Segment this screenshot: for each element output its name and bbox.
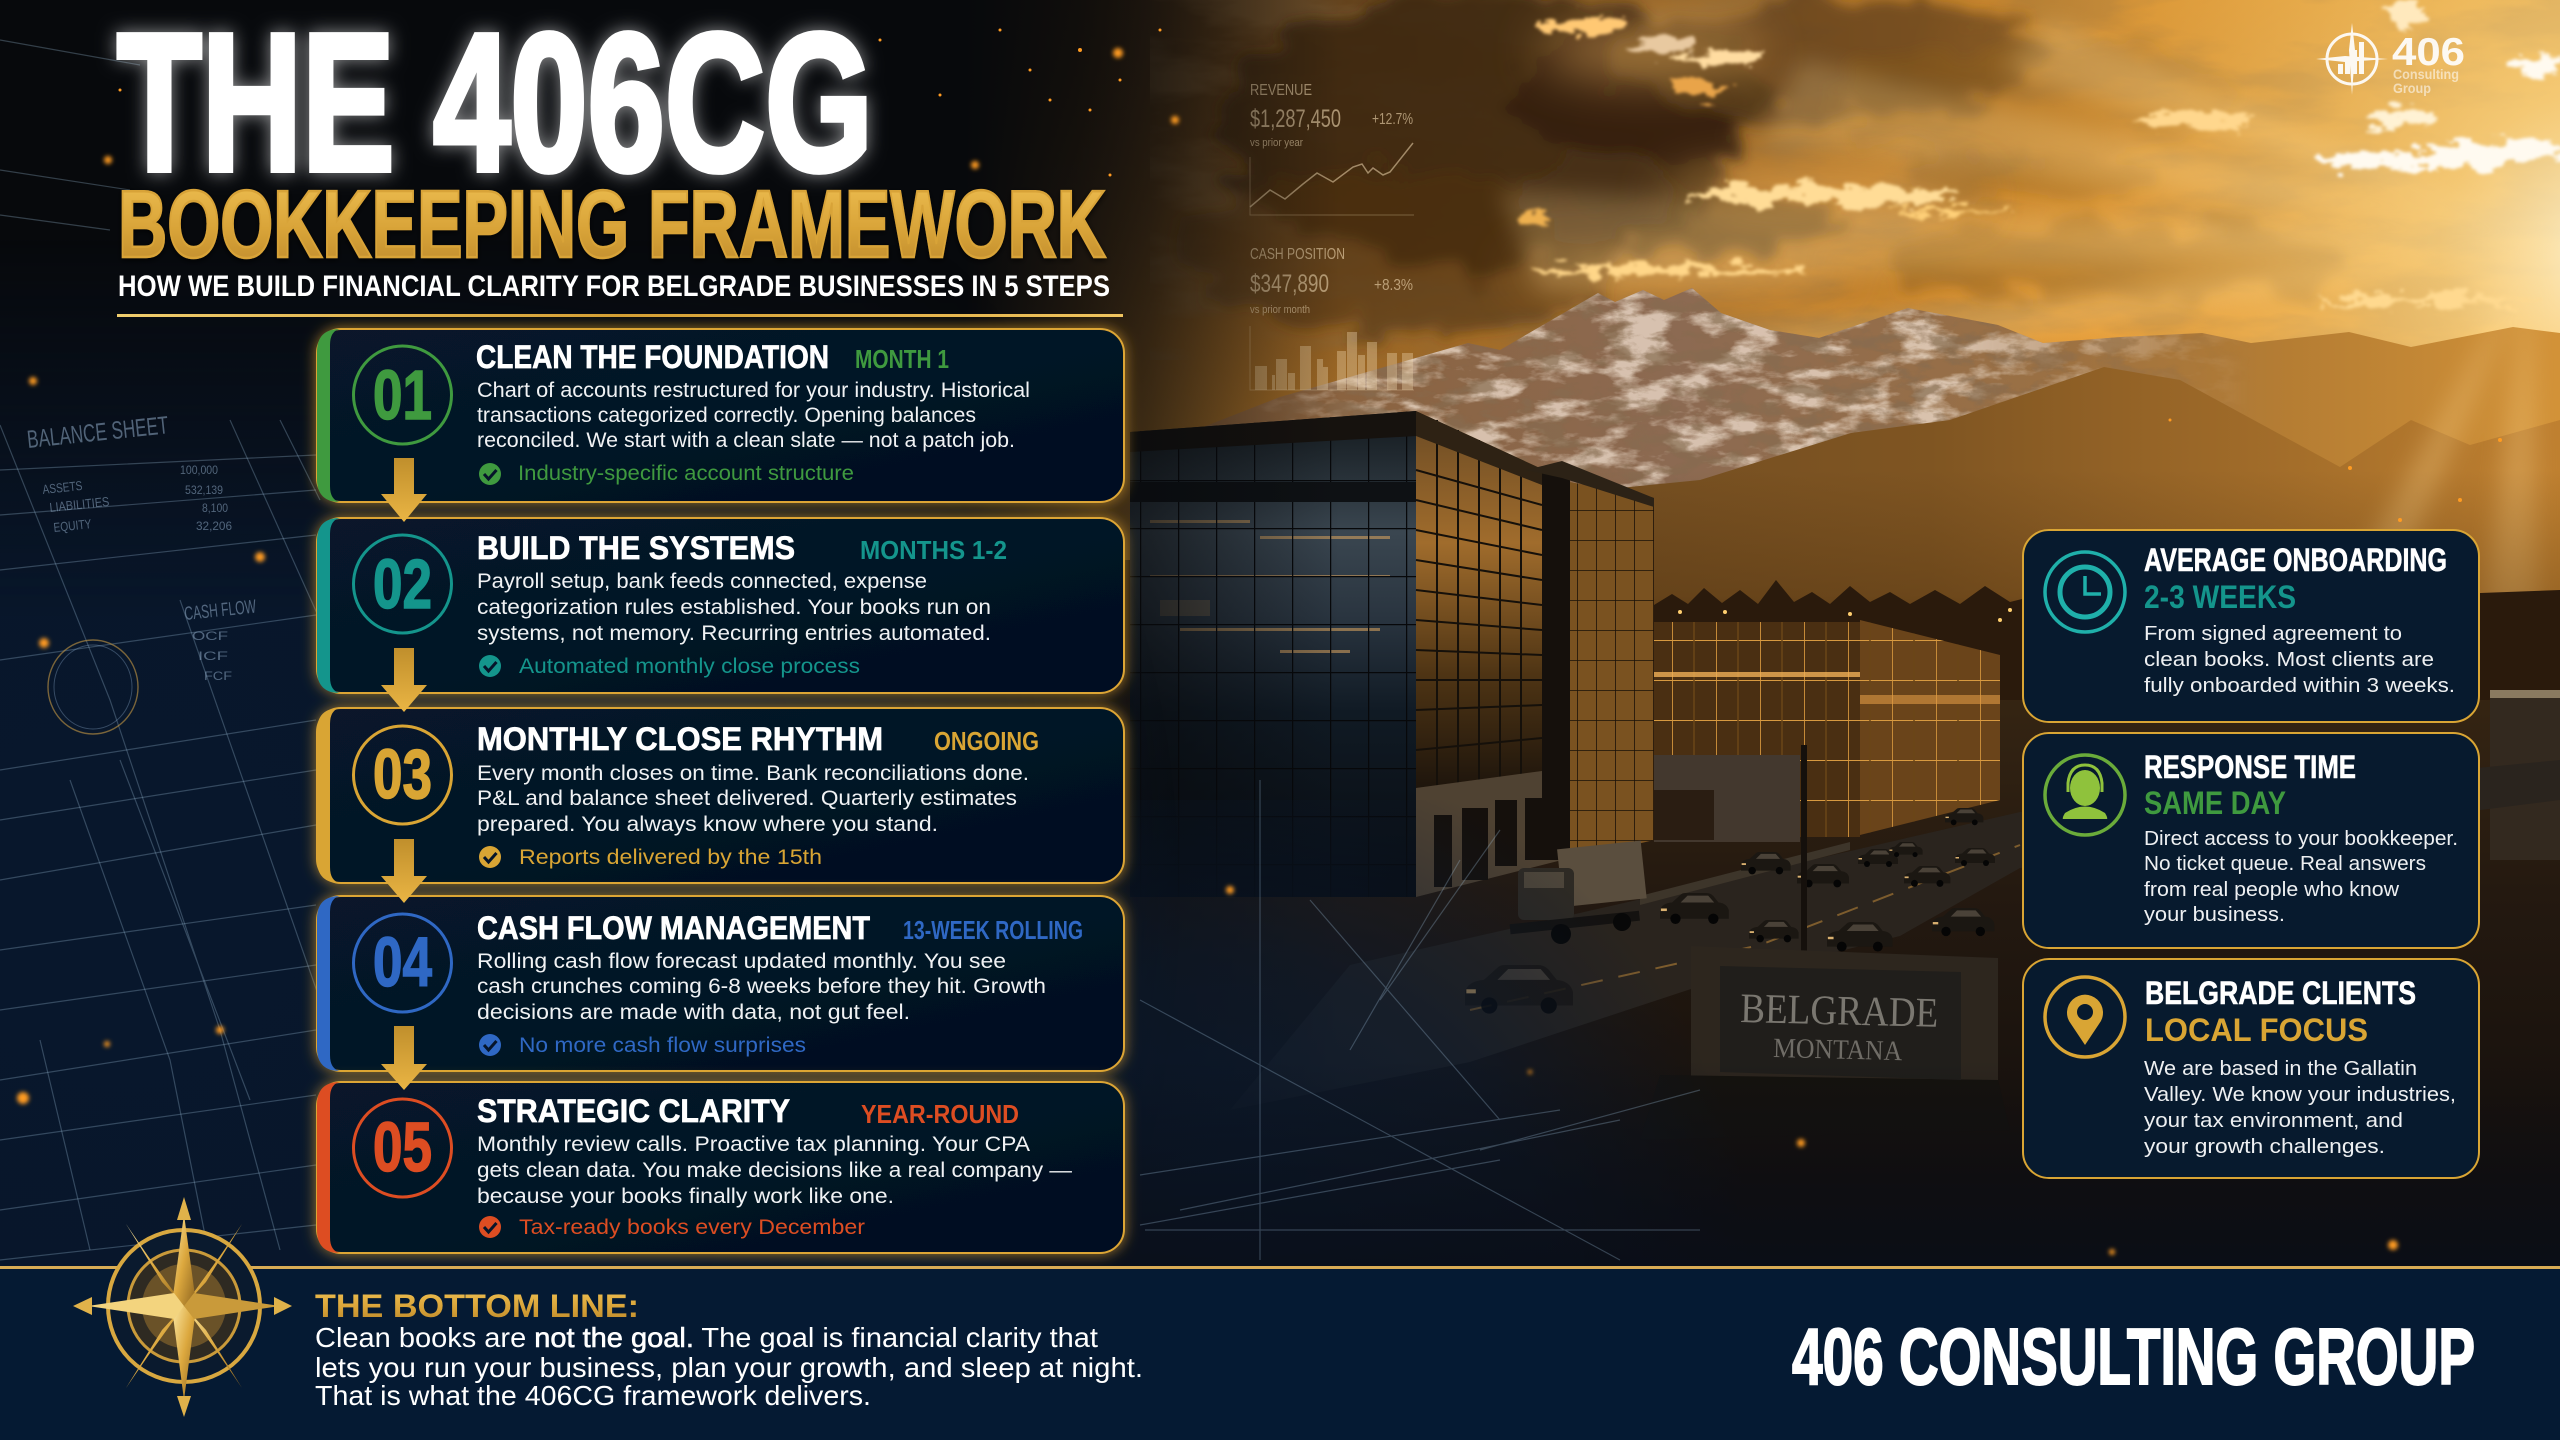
outcome: Tax-ready books every December bbox=[519, 1216, 865, 1239]
background: blueprint linework and balance sheet: ASSETS bbox=[42, 478, 83, 497]
description: cash crunches coming 6-8 weeks before they hit. Growth bbox=[477, 975, 1046, 998]
icon: map pin bbox=[2045, 977, 2125, 1057]
stat description bbox=[2144, 622, 2455, 697]
stat heading: BELGRADE CLIENTS bbox=[2145, 975, 2416, 1011]
stat value: LOCAL FOCUS bbox=[2145, 1012, 2368, 1048]
description: gets clean data. You make decisions like a real company — bbox=[477, 1159, 1072, 1182]
background: dashboard overlay: CASH POSITION bbox=[1250, 246, 1345, 263]
outcome: Automated monthly close process bbox=[519, 655, 860, 678]
stat heading: AVERAGE ONBOARDING bbox=[2144, 542, 2447, 578]
logo: 406 Consulting Group: Consulting bbox=[2393, 66, 2459, 82]
heading: the bottom line: THE BOTTOM LINE: bbox=[315, 1288, 639, 1324]
logo: 406 Consulting Group: Group bbox=[2393, 80, 2431, 96]
icon: gold compass rose bbox=[73, 1197, 292, 1417]
panel: Belgrade clients stat bbox=[2023, 959, 2479, 1178]
background: dashboard overlay: vs prior month bbox=[1250, 304, 1310, 316]
bottom line text: Clean books are not the goal. The goal is financial clarity that bbox=[315, 1322, 1098, 1353]
panel: step 3 monthly close rhythm bbox=[317, 708, 1124, 883]
timing tag: MONTHS 1-2 bbox=[860, 535, 1007, 565]
background: blueprint linework and balance sheet: 532,139 bbox=[185, 483, 223, 497]
background: ground and treeline bbox=[1100, 580, 2560, 1280]
stat description: fully onboarded within 3 weeks. bbox=[2144, 674, 2455, 697]
timing tag: 13-WEEK ROLLING bbox=[903, 915, 1083, 945]
stat heading: RESPONSE TIME bbox=[2144, 749, 2356, 785]
background: snow-capped mountains bbox=[1207, 288, 2560, 605]
description bbox=[477, 1133, 1072, 1208]
step number 04: 04 bbox=[373, 923, 432, 1001]
description: Every month closes on time. Bank reconciliations done. bbox=[477, 762, 1029, 785]
background: dashboard overlay: REVENUE bbox=[1250, 82, 1312, 99]
background: blueprint linework and balance sheet: BALANCE SHEET bbox=[26, 411, 170, 454]
panel: response time stat bbox=[2023, 733, 2479, 948]
description: because your books finally work like one. bbox=[477, 1185, 894, 1208]
step number 04 bbox=[354, 914, 452, 1012]
arrow: step 1 to 2 bbox=[381, 458, 427, 522]
step title: CASH FLOW MANAGEMENT bbox=[477, 910, 870, 946]
description: P&L and balance sheet delivered. Quarterly estimates bbox=[477, 787, 1017, 810]
stat value: SAME DAY bbox=[2144, 785, 2286, 821]
description: systems, not memory. Recurring entries automated. bbox=[477, 622, 991, 645]
background: dashboard overlay: +12.7% bbox=[1372, 111, 1413, 128]
description: categorization rules established. Your books run on bbox=[477, 596, 991, 619]
step number 03 bbox=[354, 726, 452, 824]
background: blueprint linework and balance sheet: 100,000 bbox=[180, 463, 218, 477]
stat description bbox=[2144, 827, 2458, 926]
background: road, truck and cars bbox=[1230, 745, 2560, 1110]
step number 02 bbox=[354, 535, 452, 633]
background: blueprint linework and balance sheet: FCF bbox=[204, 669, 232, 683]
stat value: 2-3 WEEKS bbox=[2144, 579, 2296, 615]
arrow: step 3 to 4 bbox=[381, 839, 427, 903]
description: Payroll setup, bank feeds connected, expense bbox=[477, 570, 927, 593]
icon: clock bbox=[2045, 552, 2125, 632]
background: dark left overlay bbox=[0, 0, 1340, 1270]
timing tag: ONGOING bbox=[934, 726, 1039, 756]
panel: bottom band bbox=[0, 1266, 2560, 1440]
step title: CLEAN THE FOUNDATION bbox=[476, 339, 829, 375]
step number 01 bbox=[354, 346, 452, 444]
stat description bbox=[2144, 1057, 2456, 1158]
step title: BUILD THE SYSTEMS bbox=[477, 530, 795, 566]
timing tag: MONTH 1 bbox=[855, 344, 949, 374]
timing tag: YEAR-ROUND bbox=[861, 1099, 1019, 1129]
background: blueprint linework and balance sheet bbox=[0, 40, 1700, 1260]
background: blueprint linework and balance sheet: 8,100 bbox=[202, 501, 228, 515]
step number 05: 05 bbox=[373, 1108, 432, 1186]
stat description: From signed agreement to bbox=[2144, 622, 2402, 645]
description bbox=[477, 950, 1046, 1024]
arrow: step 2 to 3 bbox=[381, 648, 427, 712]
arrow: step 4 to 5 bbox=[381, 1026, 427, 1090]
stat description: clean books. Most clients are bbox=[2144, 648, 2434, 671]
background: blueprint linework and balance sheet: CASH FLOW bbox=[183, 597, 257, 625]
description bbox=[477, 570, 991, 645]
background: Belgrade Montana monument sign bbox=[1640, 946, 2010, 1140]
description: transactions categorized correctly. Opening balances bbox=[477, 404, 976, 427]
bottom line text: lets you run your business, plan your growth, and sleep at night. bbox=[315, 1352, 1143, 1383]
panel: step 2 build the systems bbox=[317, 518, 1124, 693]
outcome: Industry-specific account structure bbox=[518, 462, 854, 485]
stat description: your tax environment, and bbox=[2144, 1109, 2403, 1132]
bottom line text bbox=[315, 1322, 1143, 1411]
step number 05 bbox=[354, 1099, 452, 1197]
background: construction building bbox=[1654, 620, 2000, 842]
background: dashboard overlay: vs prior year bbox=[1250, 137, 1303, 149]
background: dashboard overlay: +8.3% bbox=[1374, 277, 1413, 294]
background: blueprint linework and balance sheet: OCF bbox=[192, 629, 228, 643]
icon: support agent bbox=[2045, 755, 2125, 835]
description: Chart of accounts restructured for your industry. Historical bbox=[477, 379, 1030, 402]
heading: Bookkeeping Framework: BOOKKEEPING FRAMEWORK bbox=[118, 171, 1106, 278]
step number 02: 02 bbox=[373, 545, 432, 623]
description: reconciled. We start with a clean slate — not a patch job. bbox=[477, 429, 1015, 452]
background: sunset sky bbox=[0, 0, 2560, 760]
background: blueprint linework and balance sheet: LIABILITIES bbox=[49, 494, 110, 515]
description: prepared. You always know where you stand. bbox=[477, 813, 938, 836]
step title: STRATEGIC CLARITY bbox=[477, 1093, 790, 1129]
background: glass office building bbox=[1130, 411, 1654, 897]
background: blueprint linework and balance sheet: EQUITY bbox=[53, 516, 92, 535]
logo: 406 Consulting Group: 406 bbox=[2392, 31, 2465, 74]
step title: MONTHLY CLOSE RHYTHM bbox=[477, 721, 883, 757]
bottom line text: That is what the 406CG framework delivers. bbox=[315, 1380, 871, 1411]
background: Belgrade Montana monument sign: MONTANA bbox=[1773, 1033, 1903, 1067]
logo: 406 Consulting Group bbox=[2316, 23, 2465, 96]
step number 03: 03 bbox=[373, 735, 432, 813]
panel: step 1 clean the foundation bbox=[317, 329, 1124, 502]
step number 01: 01 bbox=[373, 356, 432, 434]
description bbox=[477, 379, 1030, 452]
background: dashboard overlay: $347,890 bbox=[1250, 270, 1329, 298]
stat description: your growth challenges. bbox=[2144, 1135, 2385, 1158]
panel: step 5 strategic clarity bbox=[317, 1082, 1124, 1253]
description: Monthly review calls. Proactive tax planning. Your CPA bbox=[477, 1133, 1030, 1156]
background: dashboard overlay bbox=[1250, 82, 1414, 390]
background: dashboard overlay: $1,287,450 bbox=[1250, 105, 1341, 133]
background: Belgrade Montana monument sign: BELGRADE bbox=[1740, 986, 1939, 1037]
description: decisions are made with data, not gut feel. bbox=[477, 1001, 910, 1024]
stat description: Direct access to your bookkeeper. bbox=[2144, 827, 2458, 850]
outcome: Reports delivered by the 15th bbox=[519, 846, 822, 869]
panel: step 4 cash flow management bbox=[317, 896, 1124, 1071]
stat description: Valley. We know your industries, bbox=[2144, 1083, 2456, 1106]
subtitle: HOW WE BUILD FINANCIAL CLARITY FOR BELGRADE BUSINESSES IN 5 STEPS bbox=[118, 270, 1110, 303]
description bbox=[477, 762, 1029, 836]
stat description: We are based in the Gallatin bbox=[2144, 1057, 2417, 1080]
stat description: No ticket queue. Real answers bbox=[2144, 852, 2426, 875]
background: navy overlay bbox=[0, 333, 2560, 1266]
stat description: your business. bbox=[2144, 903, 2285, 926]
background: blueprint linework and balance sheet: ICF bbox=[198, 649, 228, 663]
outcome: No more cash flow surprises bbox=[519, 1034, 806, 1057]
description: Rolling cash flow forecast updated monthly. You see bbox=[477, 950, 1006, 973]
panel: average onboarding stat bbox=[2023, 530, 2479, 722]
stat description: from real people who know bbox=[2144, 878, 2399, 901]
background: blueprint linework and balance sheet: 32,206 bbox=[196, 519, 232, 533]
